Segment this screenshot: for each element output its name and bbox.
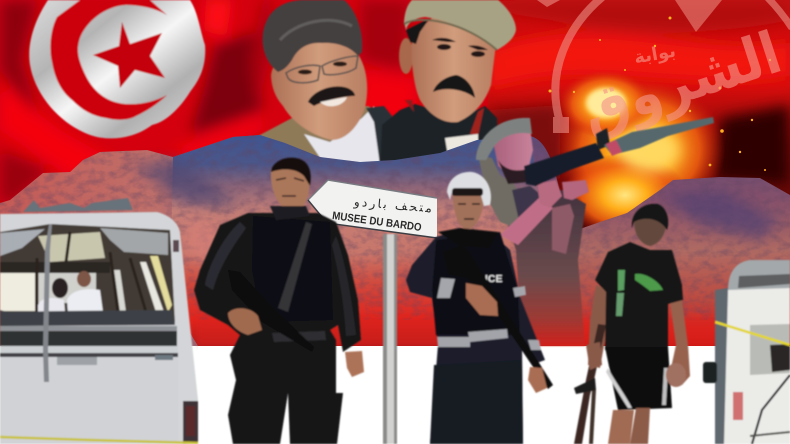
damage panels [0, 229, 45, 256]
caution tape [715, 322, 790, 345]
flag folds [0, 0, 420, 205]
police officer left [194, 158, 364, 444]
facial features [458, 204, 480, 219]
vest label: ICE [485, 273, 503, 285]
sparks [548, 16, 771, 171]
RPG warhead [604, 117, 714, 155]
forensic officers [38, 298, 66, 323]
robe [500, 190, 586, 346]
cab roof [728, 260, 790, 292]
collar [438, 228, 498, 248]
wiper [752, 375, 790, 444]
fighter with RPG [476, 117, 714, 346]
mirror [703, 362, 717, 383]
sign Latin text: MUSEE DU BARDO [331, 210, 423, 234]
head [271, 162, 309, 207]
roof debris [23, 198, 133, 212]
window [750, 324, 790, 375]
hands [537, 180, 562, 208]
brows and eyes [432, 38, 456, 42]
upper arm and forearm [500, 197, 553, 245]
body [194, 213, 361, 444]
seat row [0, 310, 175, 326]
lapel [366, 106, 396, 165]
police truck right [703, 260, 790, 444]
teeth [320, 97, 347, 106]
rock shadows [130, 160, 780, 270]
launcher body [524, 143, 604, 186]
beard [498, 160, 530, 184]
left hand [228, 308, 262, 335]
street sign [308, 180, 437, 238]
band strip [0, 326, 177, 332]
explosion [555, 70, 725, 237]
glasses [286, 56, 358, 83]
hanging strip [43, 224, 52, 382]
watermark logo [537, 0, 790, 147]
vest [252, 216, 333, 322]
jacket [380, 104, 500, 170]
rifle [443, 245, 553, 389]
head [453, 194, 484, 230]
arms [588, 285, 607, 368]
sleeve highlights [205, 222, 246, 290]
vest [432, 232, 520, 335]
reflective stripes [437, 278, 455, 298]
ear [399, 38, 413, 74]
dark beam [0, 262, 110, 273]
bus badge [57, 357, 97, 365]
bus body [0, 212, 198, 444]
moustache [308, 86, 355, 106]
left hand [586, 342, 602, 370]
bright openings [0, 273, 35, 311]
flag emblem: white disc, crescent and star [29, 0, 205, 138]
head [634, 211, 666, 246]
sign Arabic text: متحف باردو [352, 195, 432, 216]
tail light [183, 401, 198, 444]
chest [512, 186, 545, 225]
portrait: left politician [258, 0, 396, 170]
hand [466, 283, 498, 316]
portrait: right politician [380, 0, 516, 170]
eyes [298, 70, 312, 74]
background: flag red [0, 0, 530, 240]
dark band [0, 331, 177, 346]
object in hand [666, 363, 686, 387]
collar [270, 206, 310, 220]
turban [476, 118, 532, 160]
mountains right [530, 136, 790, 346]
street sign post [383, 234, 397, 444]
police officer right [406, 172, 553, 444]
belt [272, 331, 326, 342]
suit [258, 106, 392, 170]
mountain rock texture [0, 135, 790, 320]
shirt [595, 242, 683, 350]
shirt print [618, 270, 625, 291]
shirt [445, 134, 478, 156]
hair [271, 158, 311, 186]
facial features [276, 178, 304, 196]
running young man [574, 204, 690, 444]
background: fire sky [488, 0, 790, 240]
window frame bars [37, 232, 146, 312]
hair [632, 204, 668, 230]
trousers [430, 360, 523, 444]
face [492, 128, 533, 176]
watermark small word: بوابة [632, 41, 677, 68]
sling [278, 222, 312, 312]
rifle [574, 324, 606, 444]
hair [263, 0, 362, 72]
hair [406, 18, 430, 44]
bombed bus [0, 198, 198, 444]
legs [608, 410, 634, 444]
mountains left [0, 135, 260, 346]
caution tape [0, 437, 198, 443]
body [406, 230, 545, 444]
red base band [198, 318, 718, 346]
seam [0, 353, 178, 357]
cap [404, 0, 516, 50]
face [411, 18, 496, 122]
moustache [433, 75, 475, 98]
lower panel [0, 357, 178, 444]
face [271, 42, 367, 140]
right hand [345, 351, 364, 377]
window interior [0, 224, 175, 323]
rifle [228, 270, 314, 352]
shirt [304, 106, 382, 165]
mountains centre [170, 135, 560, 346]
body [724, 288, 790, 444]
shorts [605, 347, 672, 410]
white lower band [198, 346, 720, 444]
scarf [478, 155, 524, 228]
white helmet [447, 172, 491, 206]
tail light [733, 392, 743, 420]
